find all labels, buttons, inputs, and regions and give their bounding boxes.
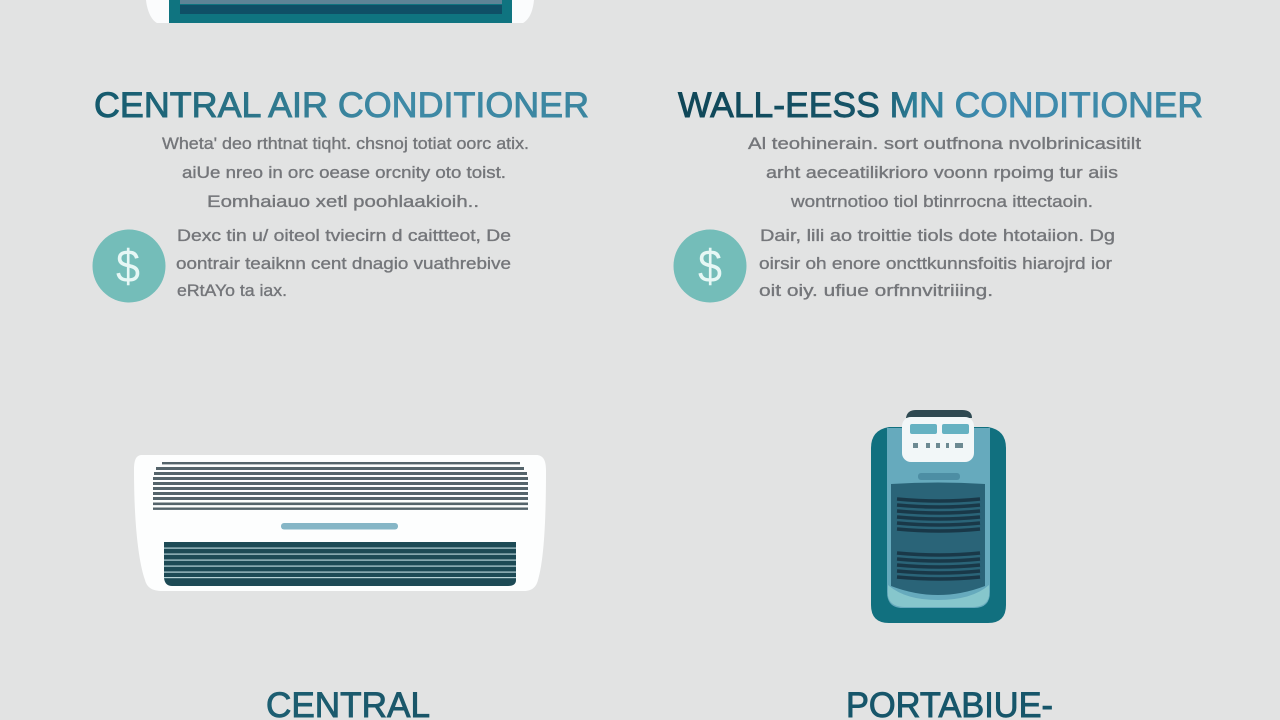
- text block: cost note: oirsir oh enore oncttkunnsfoitis hiarojrd ior: [759, 254, 1112, 273]
- text block: description: Wheta' deo rthtnat tiqht. chsnoj totiat oorc atix.: [162, 134, 529, 153]
- grille panel: [891, 482, 985, 595]
- control buttons: [913, 443, 963, 448]
- text block: cost note: [759, 226, 1115, 300]
- inner body: [887, 428, 990, 608]
- icon: white split air conditioner: [134, 455, 546, 591]
- text block: description: [162, 134, 529, 211]
- display right: [942, 424, 969, 434]
- display left: [910, 424, 937, 434]
- icon: dollar coin: [92, 230, 166, 302]
- text block: description: arht aeceatilikrioro voonn rpoimg tur aiis: [766, 163, 1118, 182]
- text block: cost note: eRtAYo ta iax.: [177, 281, 287, 300]
- grille slats: [897, 499, 980, 579]
- lower vent slats: [164, 542, 516, 586]
- upper vent lines: [153, 462, 528, 510]
- control panel: [902, 417, 974, 462]
- panel: portable unit: [846, 410, 1053, 720]
- text block: description: Al teohinerain. sort outfnona nvolbrinicasitilt: [748, 134, 1141, 153]
- text block: description: wontrnotioo tiol btinrrocna ittectaoin.: [790, 192, 1093, 211]
- indicator bar: [281, 523, 398, 530]
- panel: wall-less mini conditioner: [674, 86, 1203, 302]
- text block: description: aiUe nreo in orc oease orcnity oto toist.: [182, 163, 506, 182]
- heading: wall-less mini conditioner: WALL-EESS MN CONDITIONER: [678, 86, 1203, 125]
- text block: cost note: Dair, lili ao troittie tiols dote htotaiion. Dg: [760, 226, 1115, 245]
- icon: dollar coin: $: [698, 240, 722, 292]
- top handle: [906, 410, 972, 418]
- text block: description: [748, 134, 1141, 211]
- panel: central air conditioner top unit: [92, 0, 589, 302]
- text block: cost note: Dexc tin u/ oiteol tviecirn d caittteot, De: [177, 226, 511, 245]
- text block: cost note: [176, 226, 511, 300]
- slot: [918, 473, 960, 480]
- text block: description: Eomhaiauo xetl poohlaakioih..: [207, 192, 479, 211]
- icon: dollar coin: [674, 230, 746, 302]
- outer body: [871, 427, 1006, 623]
- panel: central unit: [134, 455, 546, 720]
- heading: central air conditioner: CENTRAL AIR CONDITIONER: [94, 86, 589, 125]
- icon: dollar coin: $: [116, 240, 140, 292]
- text block: cost note: oit oiy. ufiue orfnnvitriiing.: [759, 281, 993, 300]
- icon: cropped unit base: [146, 0, 534, 23]
- icon: portable air conditioner: [871, 410, 1006, 623]
- text block: cost note: oontrair teaiknn cent dnagio vuathrebive: [176, 254, 511, 273]
